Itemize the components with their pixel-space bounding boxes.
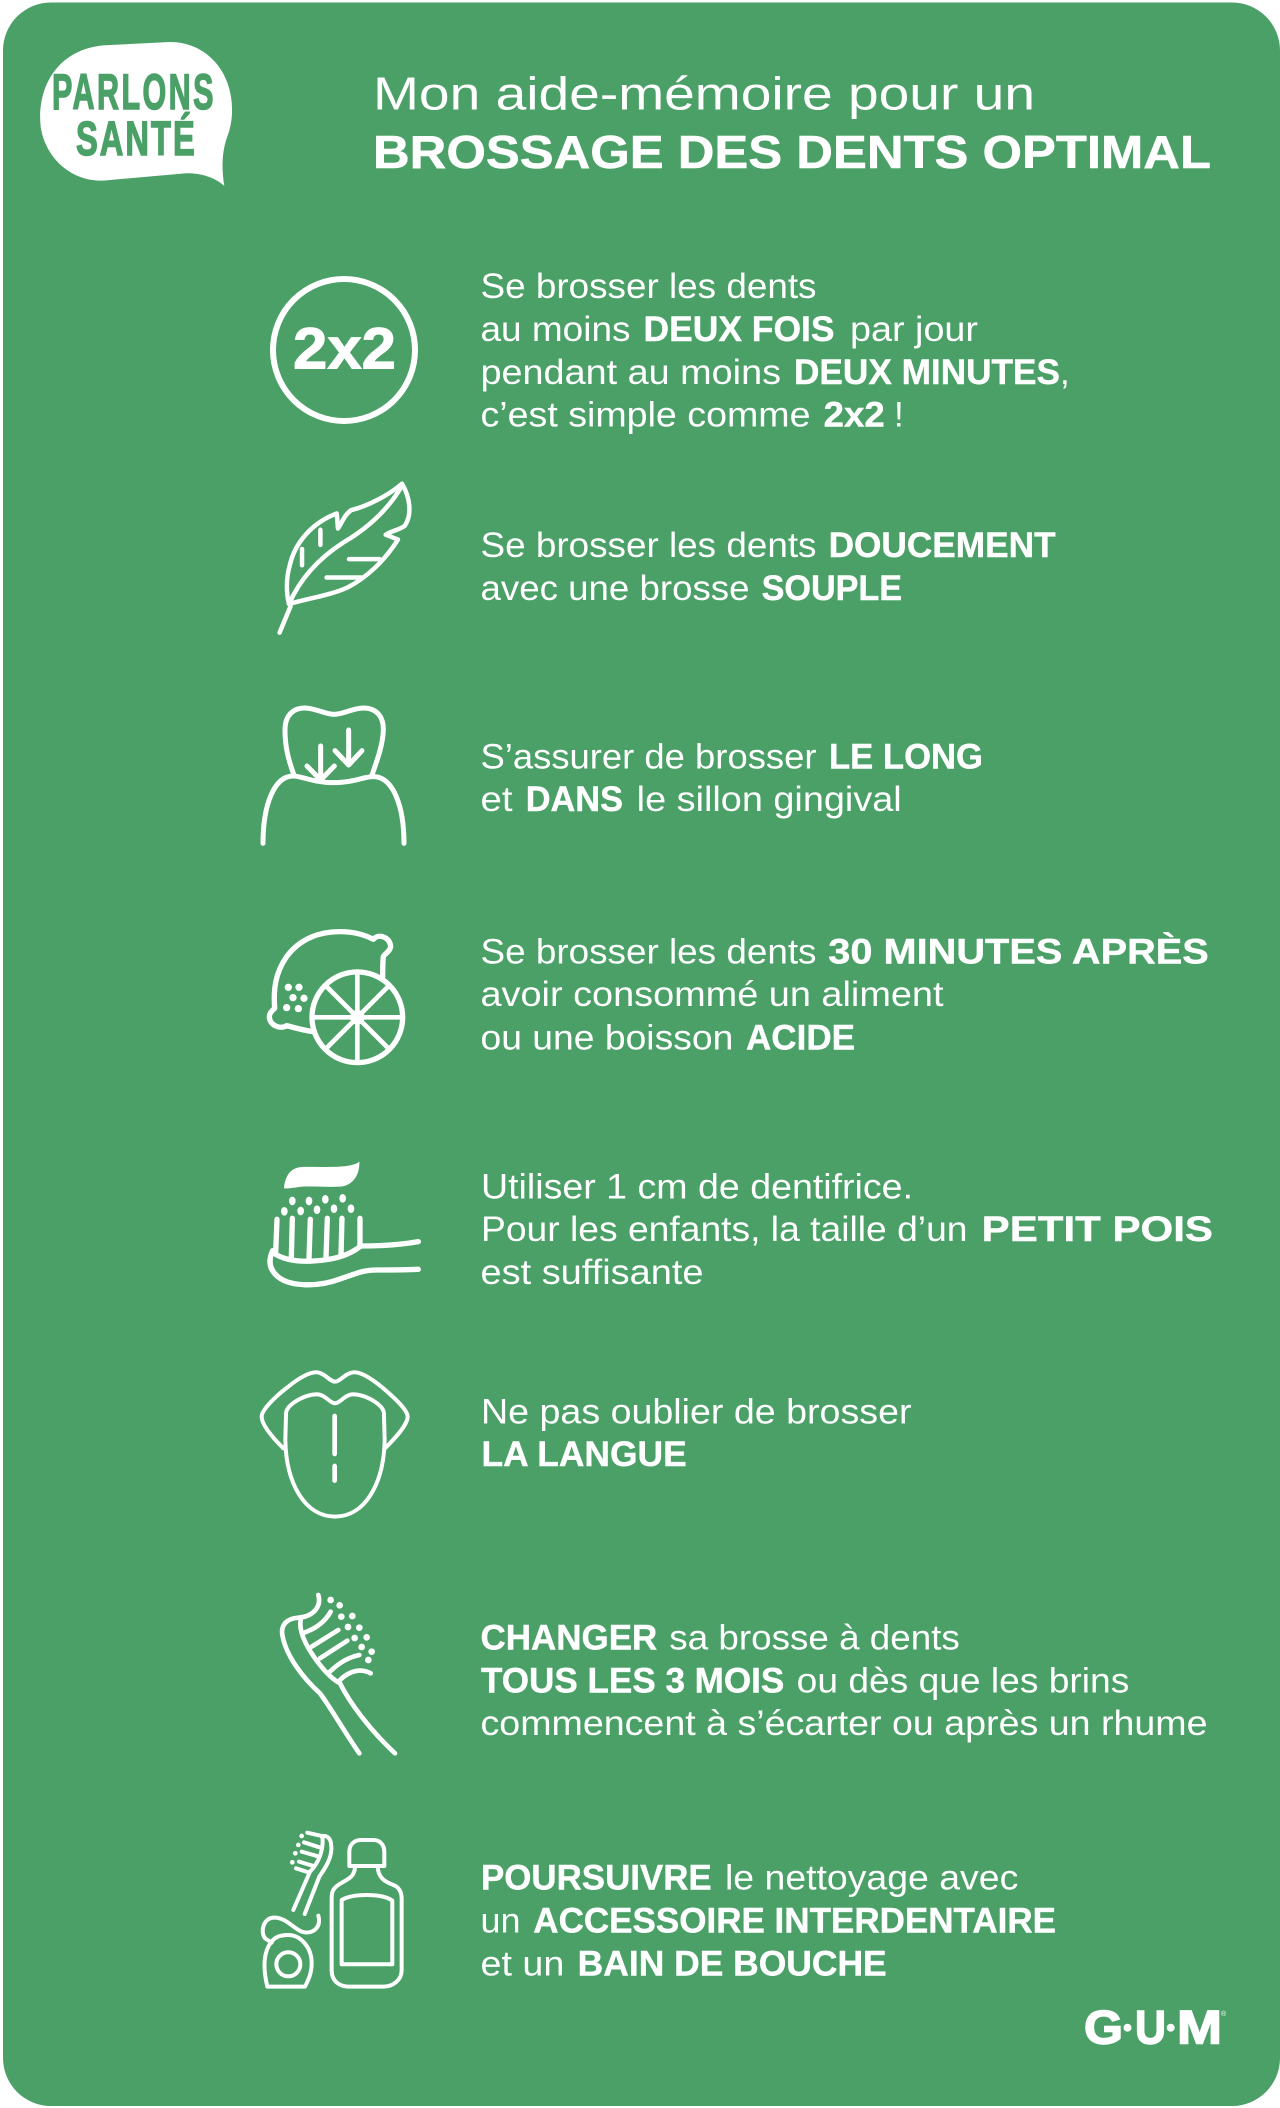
icon: tooth with arrows [263, 708, 404, 843]
item 3: along the gum line [263, 708, 983, 843]
text: continue cleaning: BAIN DE BOUCHE [578, 1945, 887, 1984]
title [373, 68, 1211, 178]
icon: lemon [269, 932, 403, 1063]
item 1: twice a day for two minutes [273, 267, 1070, 434]
text: along and in the sulcus: S’assurer de brosser [480, 737, 817, 776]
text: brushing frequency: 2x2 [824, 396, 885, 434]
text: gentle with soft brush: Se brosser les dents [480, 526, 816, 565]
item 8: interdental and mouthwash [263, 1833, 1056, 1987]
text: wait after acidic food [480, 931, 1209, 1057]
text: continue cleaning: et un [480, 1945, 564, 1984]
text: change every three months: ou dès que les brins [797, 1661, 1129, 1700]
text: continue cleaning: un [480, 1902, 520, 1941]
icon: 2x2 circle [273, 279, 415, 421]
logo: GUM: U [1135, 2000, 1166, 2054]
logo: GUM: ® [1221, 2010, 1227, 2018]
logo: GUM: G [1084, 2000, 1123, 2054]
text: toothpaste quantity: Pour les enfants, la taille d’un [481, 1210, 968, 1249]
item 2: gentle brushing [280, 484, 1056, 633]
icon: interdental brush, floss and mouthwash [263, 1833, 402, 1987]
text: change every three months: TOUS LES 3 MOIS [481, 1661, 784, 1700]
text: toothpaste quantity: Utiliser 1 cm de dentifrice. [481, 1167, 913, 1206]
logo: Parlons Santé speech bubble [40, 42, 232, 186]
text: gentle with soft brush: SOUPLE [762, 569, 902, 608]
text: along and in the sulcus: le sillon gingival [637, 780, 902, 819]
icon: leaf [280, 484, 409, 633]
text: continue cleaning [480, 1858, 1056, 1984]
text: wait after acidic food: avoir consommé un aliment [480, 975, 944, 1014]
text: brushing frequency: DEUX FOIS [644, 310, 834, 349]
logo: GUM [1084, 2000, 1227, 2054]
text: change every three months [480, 1618, 1208, 1743]
text: brushing frequency: au moins [480, 310, 630, 349]
text: gentle with soft brush: DOUCEMENT [829, 526, 1056, 565]
text: brushing frequency: ! [894, 396, 904, 434]
text: do not forget tongue: Ne pas oublier de brosser [481, 1392, 912, 1431]
logo: GUM: M [1177, 2000, 1222, 2054]
text: brushing frequency: Se brosser les dents [480, 267, 816, 306]
text: along and in the sulcus: DANS [526, 780, 623, 819]
title: BROSSAGE DES DENTS OPTIMAL [373, 126, 1211, 178]
text: change every three months: sa brosse à dents [669, 1618, 960, 1657]
text: brushing frequency: par jour [850, 310, 978, 349]
text: wait after acidic food: 30 MINUTES APRÈS [828, 931, 1209, 971]
item 6: brush the tongue [262, 1372, 912, 1517]
text: change every three months: commencent à s’écarter ou après un rhume [480, 1704, 1208, 1743]
text: continue cleaning: ACCESSOIRE INTERDENTAIRE [533, 1902, 1056, 1941]
text: wait after acidic food: ACIDE [746, 1018, 855, 1057]
icon: worn toothbrush [282, 1595, 395, 1753]
item 4: thirty minutes after acid [269, 931, 1209, 1063]
text: brushing frequency: c’est simple comme [480, 396, 810, 434]
text: do not forget tongue [481, 1392, 912, 1474]
icon: 2x2 circle: 2x2 [293, 316, 396, 382]
text: along and in the sulcus: et [480, 780, 513, 819]
text: brushing frequency: pendant au moins [480, 353, 781, 392]
text: continue cleaning: POURSUIVRE [481, 1858, 712, 1897]
text: along and in the sulcus [480, 737, 983, 819]
logo: Parlons Santé speech bubble: PARLONS [52, 64, 216, 120]
text: wait after acidic food: ou une boisson [480, 1018, 733, 1057]
logo: Parlons Santé speech bubble: SANTÉ [76, 112, 197, 166]
text: wait after acidic food: Se brosser les dents [480, 932, 816, 971]
icon: tongue [262, 1372, 408, 1517]
text: continue cleaning: le nettoyage avec [725, 1858, 1018, 1897]
text: toothpaste quantity [480, 1167, 1213, 1292]
text: toothpaste quantity: est suffisante [480, 1253, 704, 1292]
title: Mon aide-mémoire pour un [373, 68, 1035, 120]
text: gentle with soft brush [480, 526, 1056, 608]
text: brushing frequency [480, 267, 1070, 434]
text: brushing frequency: , [1060, 353, 1070, 392]
text: do not forget tongue: LA LANGUE [482, 1435, 687, 1474]
text: gentle with soft brush: avec une brosse [480, 569, 750, 608]
text: brushing frequency: DEUX MINUTES [794, 353, 1060, 392]
text: toothpaste quantity: PETIT POIS [982, 1210, 1213, 1249]
item 5: amount of toothpaste [270, 1161, 1213, 1292]
item 7: replace the toothbrush [282, 1595, 1208, 1753]
text: change every three months: CHANGER [480, 1618, 657, 1657]
icon: toothbrush with paste [270, 1161, 418, 1285]
text: along and in the sulcus: LE LONG [829, 737, 983, 776]
